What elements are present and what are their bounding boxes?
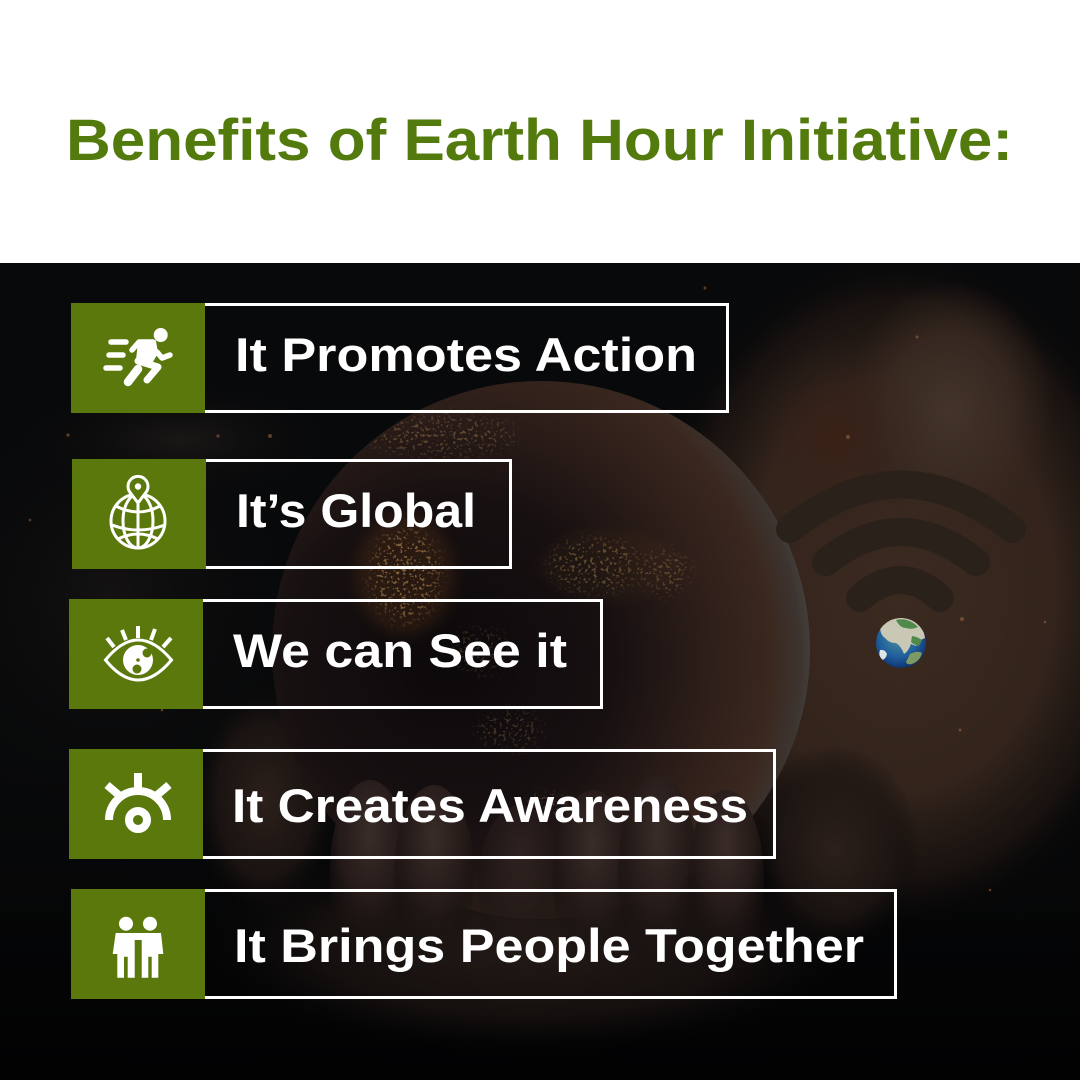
row: It Brings People Together [71, 889, 896, 999]
icon: globe with location pin [111, 476, 165, 548]
icon: wifi signal arcs [790, 484, 1012, 598]
label: It Creates Awareness [232, 779, 748, 832]
cupped fingers and palms [278, 780, 782, 1030]
label: It Promotes Action [235, 328, 697, 381]
label: It’s Global [236, 484, 476, 537]
icon: small earth [876, 618, 926, 668]
label: It Brings People Together [234, 919, 864, 972]
row: It's Global [72, 459, 510, 569]
icon: running person [106, 328, 170, 382]
title: Benefits of Earth Hour Initiative: [66, 108, 1013, 173]
blurred hand behind the globe [72, 284, 1080, 897]
star specks [29, 286, 1046, 891]
globe [272, 381, 810, 919]
icon: awareness eye [107, 773, 169, 829]
icon: eye with lashes [106, 626, 172, 680]
icon: two people [113, 917, 163, 978]
row: It Promotes Action [71, 303, 728, 413]
label: We can See it [233, 624, 567, 677]
background photo: glowing globe held in hands [0, 250, 1080, 1080]
row: We can See it [69, 599, 602, 709]
row: It Creates Awareness [69, 749, 774, 859]
lower hands [207, 709, 902, 932]
